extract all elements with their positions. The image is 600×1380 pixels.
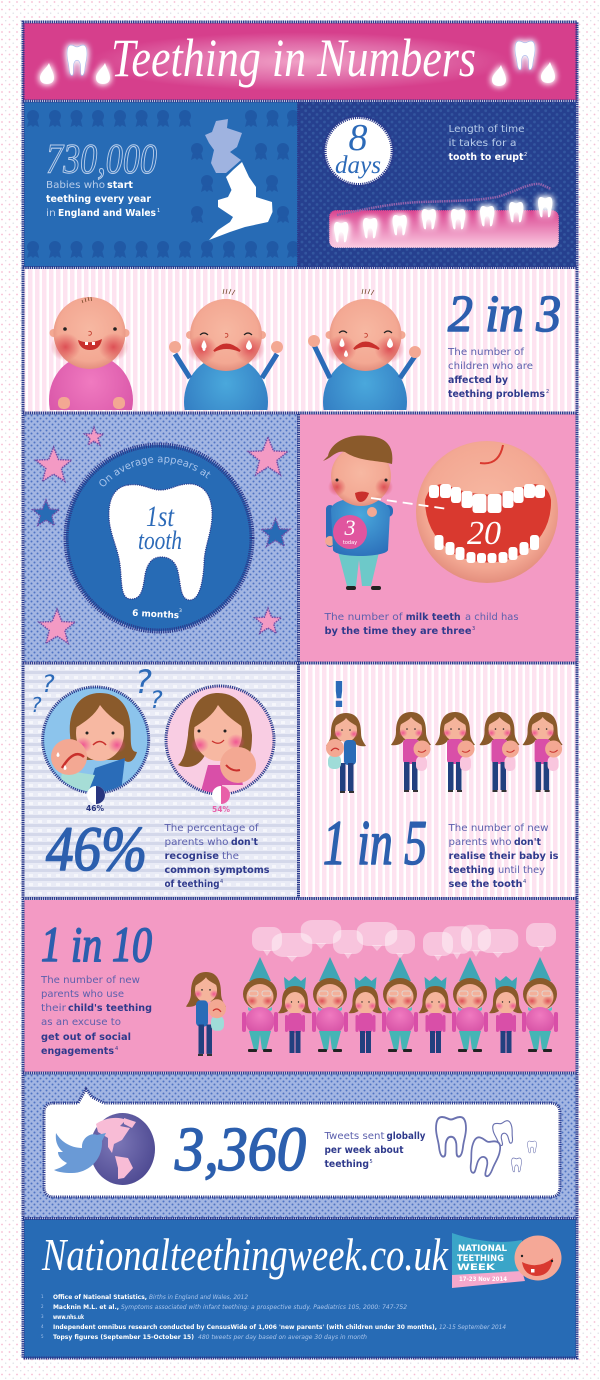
text: milk teeth	[323, 612, 518, 637]
circle with tooth	[66, 445, 252, 631]
badge: 8 days: days	[335, 152, 381, 179]
panel: 20 milk teeth	[300, 414, 576, 662]
text: length of time: tooth to erupt	[448, 152, 524, 163]
text: tweets	[323, 1131, 426, 1170]
panel: 46% parents	[24, 663, 298, 898]
text: parents recognise: parents who	[164, 837, 228, 848]
logo: National Teething Week: TEETHING	[457, 1254, 504, 1264]
text: excuse: as an excuse to	[41, 1017, 121, 1028]
logo: National Teething Week: WEEK	[457, 1263, 496, 1273]
logo: National Teething Week	[452, 1233, 562, 1288]
footnotes: 1	[41, 1294, 44, 1299]
growth line	[337, 184, 551, 215]
text: parents recognise: don't	[231, 837, 258, 848]
text: tweets: Tweets sent	[323, 1131, 385, 1142]
text: tweets: teething	[324, 1159, 369, 1170]
text: babies: Babies who	[46, 180, 105, 191]
map: Scotland	[205, 119, 242, 173]
text: parents recognise: common symptoms	[164, 865, 270, 876]
text: excuse: The number of new	[40, 975, 140, 986]
text: length of time: it takes for a	[448, 138, 516, 149]
text: milk teeth: The number of	[323, 612, 403, 623]
question marks: ?	[135, 663, 152, 701]
footnotes: www.nhs.uk	[53, 1314, 85, 1321]
statistic: 46%: 46%	[46, 813, 147, 884]
statistic: 20: 20	[467, 515, 501, 552]
question marks: ?	[150, 686, 163, 714]
badge: 8 days	[325, 117, 393, 185]
footnotes: Births in England and Wales, 2012	[149, 1294, 248, 1301]
panel: title	[23, 23, 577, 100]
icons: outline teeth	[436, 1117, 536, 1178]
6 months label: 6 months	[132, 609, 179, 621]
footnotes: 480 tweets per day based on average 30 days in month	[198, 1334, 367, 1341]
panel: 730,000 babies	[24, 102, 299, 267]
text: milk teeth: 3	[472, 626, 475, 632]
text: realise teething: don't	[514, 837, 541, 848]
text: babies: England and Wales	[58, 208, 156, 219]
footnotes: Symptoms associated with infant teething: a prospective study. Paediatrics 105, 2000: 747-752	[121, 1304, 407, 1311]
text: excuse: their	[41, 1003, 67, 1014]
text: babies	[46, 180, 160, 219]
text: children affected: children who are	[448, 361, 533, 372]
text: realise teething: parents who	[448, 837, 512, 848]
portrait: worried parent	[43, 687, 149, 800]
party guests	[242, 957, 558, 1053]
text: excuse	[40, 975, 152, 1057]
speech bubbles	[252, 920, 556, 962]
footnotes	[41, 1294, 506, 1341]
text: realise teething: until they	[498, 865, 545, 876]
question marks: ?	[42, 670, 55, 698]
panel: footer	[24, 1219, 576, 1358]
stars	[33, 427, 290, 643]
text: length of time	[448, 124, 527, 163]
pie: 46%: 46%	[86, 804, 104, 813]
badge: 3 today	[333, 515, 367, 549]
panel: 1 in 5	[300, 664, 576, 898]
tooth label: tooth	[138, 526, 182, 555]
panel: 8 days	[298, 102, 576, 267]
icons: left tooth and drops	[40, 45, 110, 84]
tooth label	[138, 500, 182, 555]
tooth	[109, 484, 212, 600]
parents with babies	[326, 712, 563, 793]
statistic: 2 in 3: 2 in 3	[448, 286, 561, 343]
text: realise teething: see the tooth	[448, 879, 522, 890]
panel: tweets	[24, 1074, 576, 1218]
text: children affected: The number of	[447, 347, 524, 358]
text: excuse: child's teething	[68, 1003, 152, 1014]
text: parents recognise: of teething	[164, 879, 220, 890]
text: tweets: globally	[386, 1131, 426, 1142]
text: excuse: 4	[115, 1046, 118, 1052]
speech bubble	[44, 1089, 560, 1197]
text: milk teeth: milk teeth	[406, 612, 461, 623]
footnotes: 2	[41, 1304, 44, 1309]
text: tweets: per week about	[324, 1145, 404, 1156]
website address: Nationalteethingweek.co.uk	[41, 1229, 449, 1280]
statistic: 1 in 5: 1 in 5	[323, 807, 427, 878]
text: excuse: parents who use	[41, 989, 124, 1000]
footnotes: 12-15 September 2014	[439, 1324, 506, 1331]
badge: 8 days: 8	[348, 117, 368, 159]
map: England and Wales	[209, 162, 272, 240]
text: realise teething: teething	[448, 865, 494, 876]
text: parents recognise: recognise	[164, 851, 219, 862]
text: realise teething: 4	[523, 879, 526, 885]
text: children affected: 2	[546, 389, 549, 395]
tooth label: 1st	[146, 500, 175, 533]
portrait: confident parent	[166, 686, 274, 800]
rosette pattern	[27, 110, 299, 258]
baby: happy in pink	[49, 296, 133, 410]
boy	[323, 436, 393, 590]
text: excuse: get out of social	[41, 1032, 131, 1043]
text: excuse: engagements	[41, 1046, 114, 1057]
text: realise teething: The number of new	[447, 823, 548, 834]
curved caption: On average appears at	[99, 456, 210, 486]
text: length of time: Length of time	[448, 124, 524, 135]
footnotes: Office of National Statistics,	[53, 1294, 147, 1301]
badge: 3 today: 3	[344, 515, 356, 540]
text: babies: in	[46, 208, 56, 219]
footnotes: 3	[41, 1314, 44, 1319]
panel: 2 in 3	[24, 269, 576, 412]
pie: 46%	[86, 786, 105, 813]
question marks	[31, 663, 163, 717]
text: realise teething: realise their baby is	[448, 851, 559, 862]
logo: National Teething Week: 17-23 Nov 2014	[459, 1276, 507, 1283]
big mouth face	[416, 441, 558, 583]
text: babies: 1	[157, 208, 160, 214]
badge: 3 today: today	[343, 540, 357, 546]
6 months label: 3	[179, 608, 182, 614]
text: realise teething	[447, 823, 559, 890]
text: tweets: 5	[370, 1159, 373, 1165]
icon: twitter bird	[54, 1133, 106, 1173]
baby: crying, blue	[169, 288, 283, 410]
text: babies: teething every year	[46, 194, 151, 205]
footnotes: Topsy figures (September 15-October 15)	[53, 1334, 194, 1341]
pointer line	[371, 498, 448, 509]
logo: National Teething Week: NATIONAL	[458, 1244, 508, 1254]
icons: right tooth and drops	[492, 41, 555, 86]
footnotes: 5	[41, 1334, 44, 1339]
pie: 54%	[212, 786, 230, 814]
text: babies: start	[107, 180, 133, 191]
parent with baby	[186, 972, 226, 1056]
pie: 54%: 54%	[212, 805, 230, 814]
text: parents recognise: The percentage of	[163, 823, 259, 834]
text: milk teeth: a child has	[465, 612, 518, 623]
exclamation mark: !	[331, 675, 347, 716]
statistic: 730,000: 730,000	[46, 137, 157, 183]
footnotes: Macknin M.L. et al.,	[53, 1304, 119, 1311]
text: children affected: teething problems	[448, 389, 545, 400]
text: parents recognise	[163, 823, 270, 890]
title text: Teething in Numbers	[111, 28, 476, 88]
panel: 1 in 10	[24, 900, 576, 1072]
text: parents recognise: the	[222, 851, 239, 862]
question marks: ?	[31, 693, 42, 717]
baby: crying, blue	[308, 288, 421, 410]
row of erupting teeth	[334, 197, 552, 242]
text: parents recognise: 4	[220, 879, 223, 885]
text: length of time: 2	[524, 152, 527, 158]
text: milk teeth: by the time they are three	[324, 626, 472, 637]
panel: 1st tooth	[24, 414, 298, 662]
statistic: 1 in 10: 1 in 10	[41, 916, 152, 972]
footnotes: Independent omnibus research conducted by CensusWide of 1,006 'new parents' (with children under 30 months),	[53, 1324, 437, 1331]
text: children affected: affected by	[448, 375, 508, 386]
gum bar	[329, 210, 559, 248]
footnotes: 4	[41, 1324, 44, 1329]
icon: globe	[90, 1113, 155, 1185]
statistic: 3,360: 3,360	[174, 1116, 306, 1184]
text: children affected	[447, 347, 549, 400]
